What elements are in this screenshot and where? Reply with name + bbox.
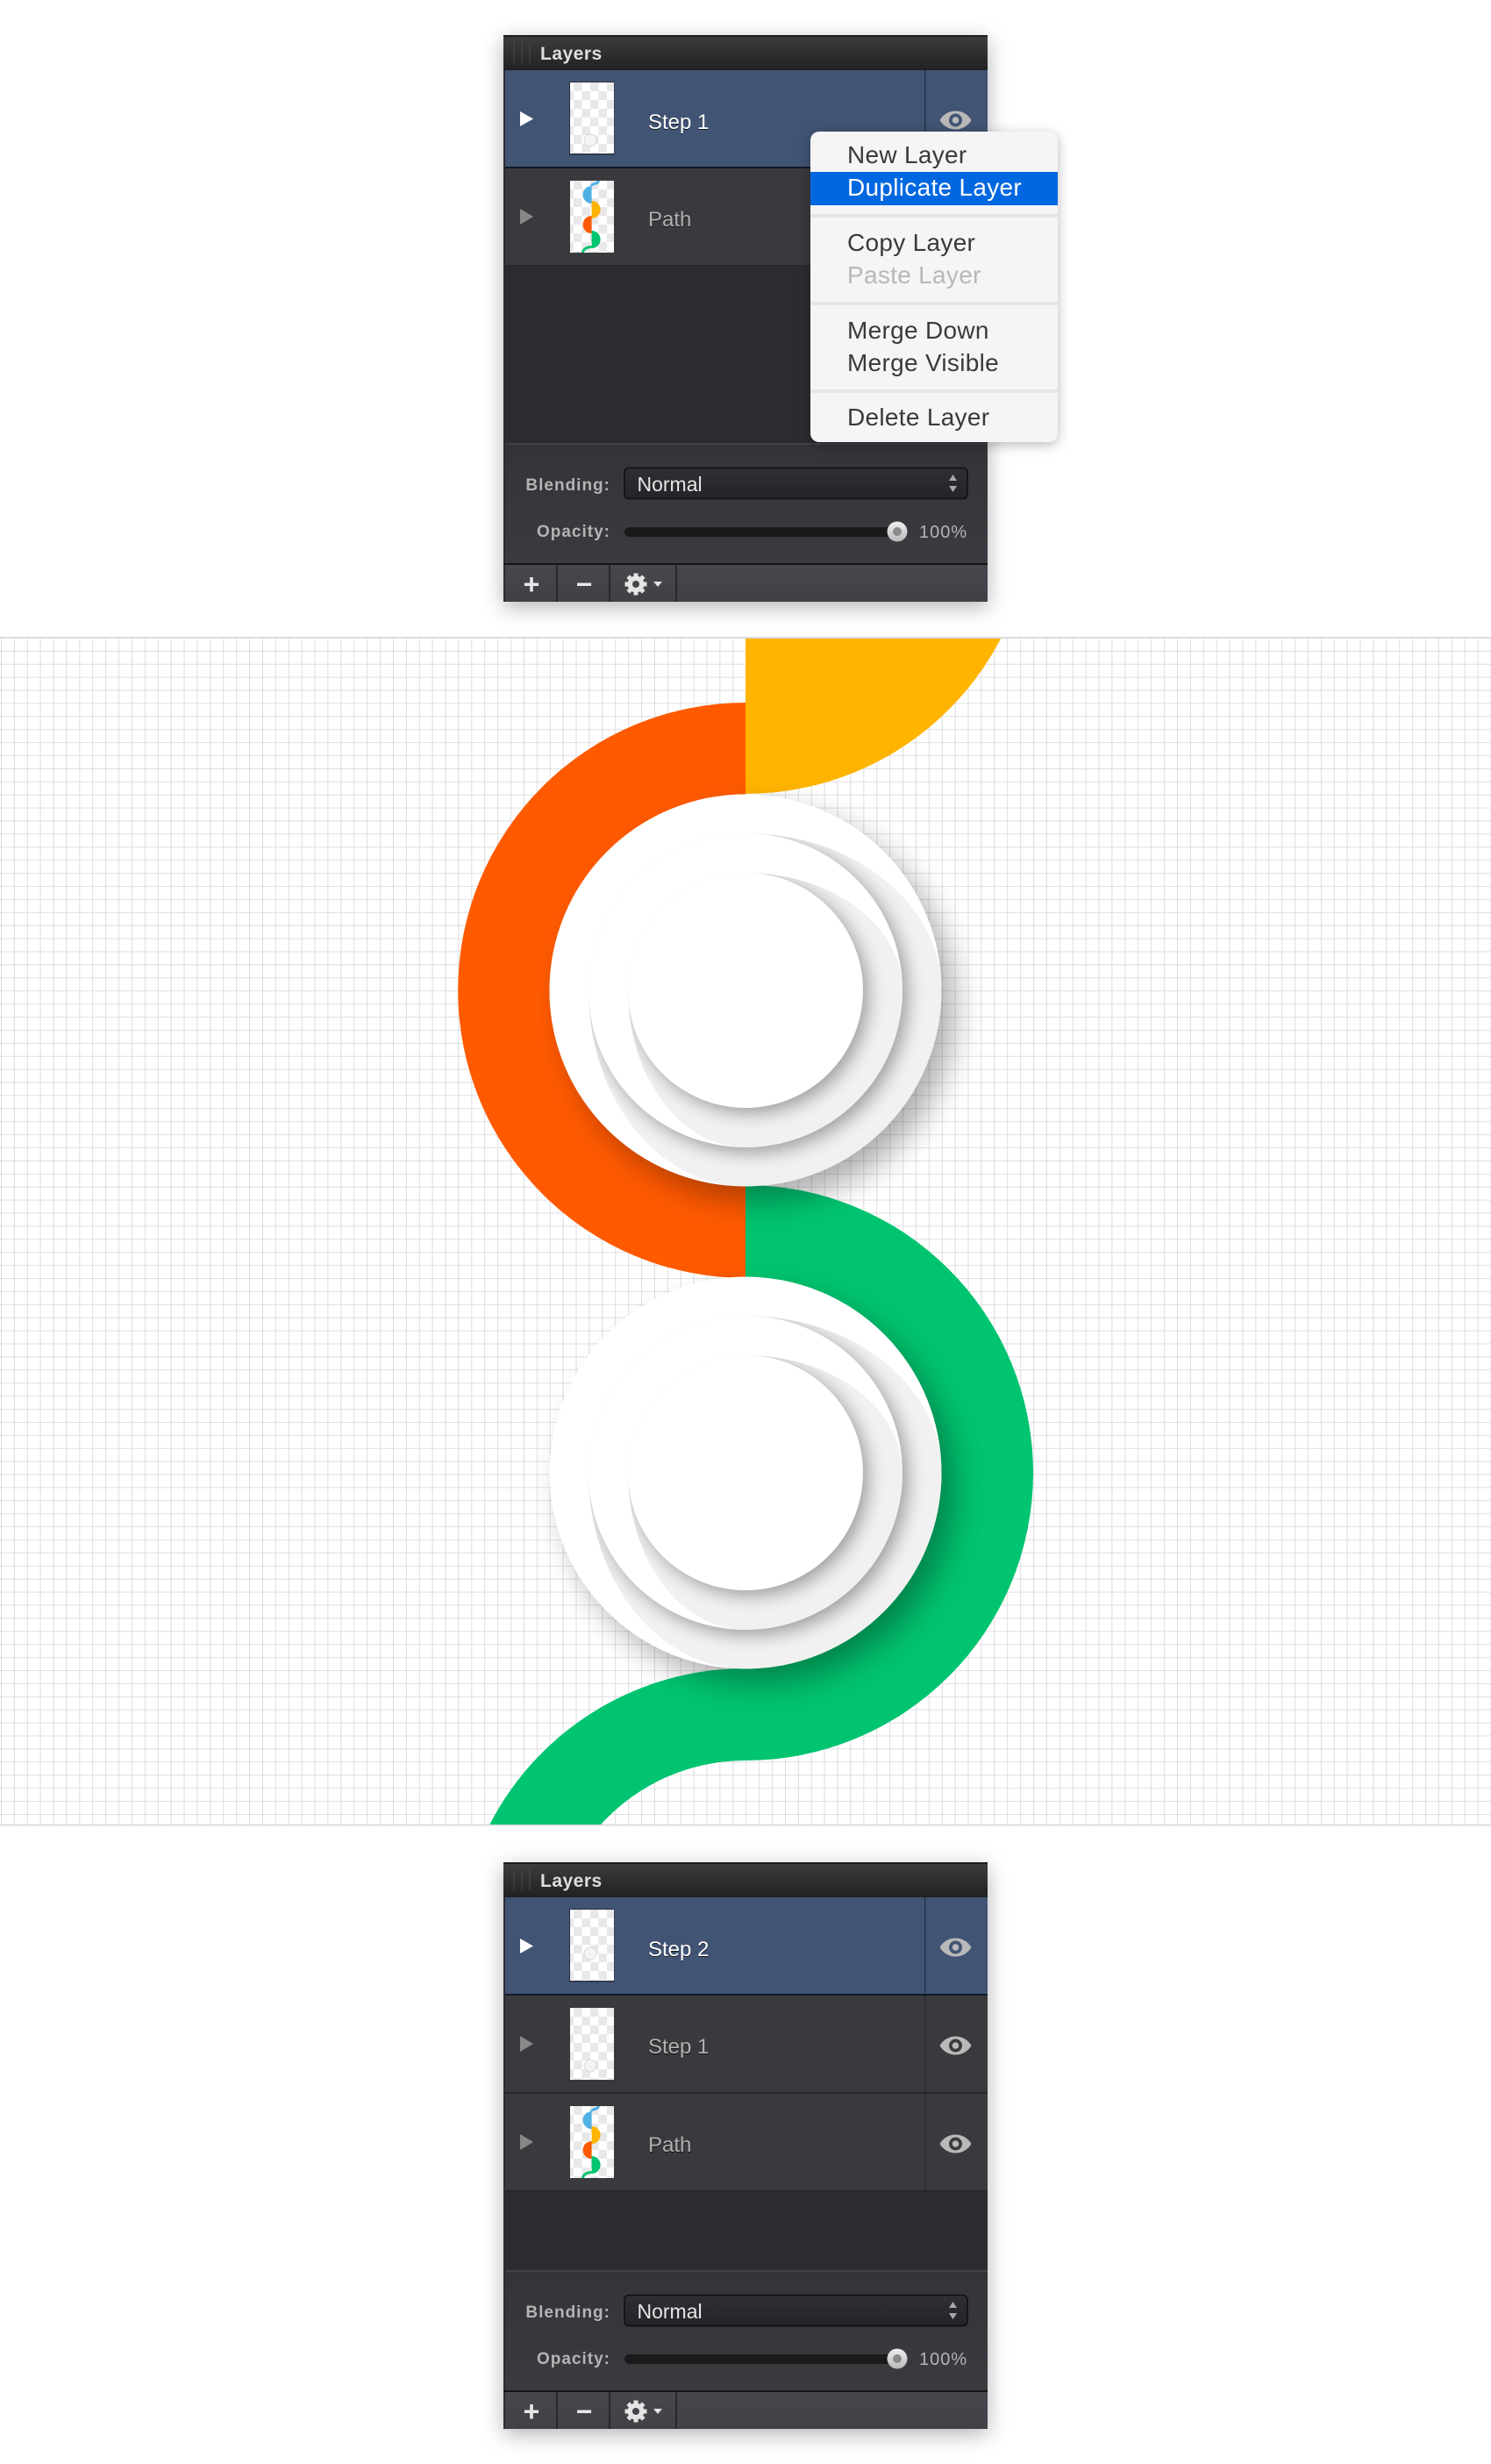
blending and opacity controls: [505, 2270, 988, 2391]
blending and opacity controls: 100%: [919, 2350, 967, 2369]
blending and opacity controls: 100%: [919, 523, 967, 542]
layer row: Step 1 selected: Step 1: [648, 111, 709, 134]
bottom toolbar: −: [576, 2396, 592, 2427]
menu highlight: [810, 172, 1058, 205]
shadow: upper circle: [565, 811, 954, 1201]
context menu: New Layer: [847, 141, 967, 168]
step 1 circles: [549, 795, 942, 1186]
layer row: Path: Path: [648, 208, 691, 232]
bottom toolbar: +: [524, 568, 539, 600]
empty layer area: [505, 2191, 988, 2270]
panel: layers panel with three rows: [503, 1862, 988, 2429]
step 2 circles: [549, 1277, 942, 1668]
context menu: [810, 132, 1058, 442]
bottom toolbar: −: [576, 568, 592, 600]
blending and opacity controls: Opacity:: [537, 523, 610, 541]
chart: S-shaped path with circles: [458, 639, 1033, 1825]
path segment: orange: [458, 703, 746, 1278]
layer row: Path: [505, 2094, 988, 2191]
grid background: [0, 637, 1491, 1826]
layer row: Step 1: Step 1: [648, 2035, 709, 2059]
bottom toolbar: +: [524, 2396, 539, 2427]
bottom toolbar: [503, 563, 988, 602]
context menu: Copy Layer: [847, 229, 975, 256]
panel: layers panel with context menu: [503, 35, 1058, 602]
bottom toolbar: [503, 2390, 988, 2429]
layer row: Step 2 selected: Step 2: [648, 1938, 709, 1961]
layer row: Path: [505, 168, 988, 267]
panel title bar: [503, 1862, 988, 1897]
layer row: Step 1 selected: [505, 70, 988, 168]
panel title bar: [503, 35, 988, 70]
context menu: Delete Layer: [847, 404, 989, 431]
path segment: green: [485, 1185, 1033, 1833]
context menu: Merge Visible: [847, 349, 999, 376]
context menu: Merge Down: [847, 317, 989, 344]
panel title bar: Layers: [540, 44, 603, 64]
layer row: Step 1: [505, 1996, 988, 2094]
layer row: Step 2 selected: [505, 1897, 988, 1996]
panel body: [503, 1862, 988, 2429]
context menu: Duplicate Layer: [847, 174, 1022, 201]
shadow: lower circle: [565, 1294, 954, 1683]
panel title bar: Layers: [540, 1871, 603, 1891]
blending and opacity controls: Blending:: [525, 476, 610, 495]
blending and opacity controls: Normal: [637, 473, 703, 496]
context menu: Paste Layer: [847, 261, 981, 289]
blending and opacity controls: [505, 443, 988, 564]
empty layer area: [505, 267, 988, 443]
blending and opacity controls: Opacity:: [537, 2350, 610, 2368]
path segment: yellow: [746, 639, 1001, 794]
blending and opacity controls: Normal: [637, 2300, 703, 2323]
blending and opacity controls: Blending:: [525, 2303, 610, 2322]
panel body: [503, 35, 988, 602]
layer row: Path: Path: [648, 2133, 691, 2157]
